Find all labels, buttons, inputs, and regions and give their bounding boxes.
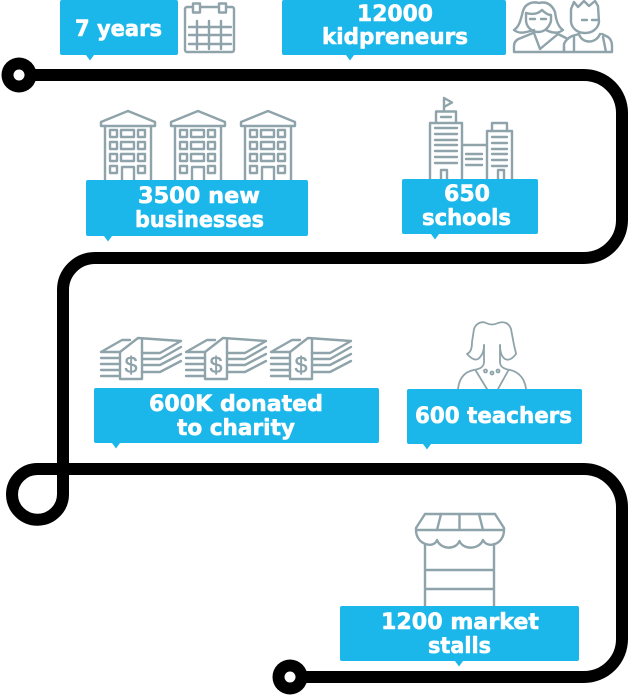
callout: 1200 market stalls <box>340 606 579 666</box>
icon: stacks of money: $ <box>125 352 138 378</box>
icon: market stall <box>416 514 504 607</box>
callout: 12000 kidpreneurs: kidpreneurs <box>322 24 468 50</box>
callout: 600 teachers <box>407 389 582 450</box>
callout: 650 schools: 650 <box>444 181 490 207</box>
icon: stacks of money <box>101 338 351 379</box>
callout: 600K donated to charity: 600K donated <box>149 391 323 417</box>
timeline end node <box>272 660 308 694</box>
icon: stacks of money: $ <box>210 352 223 378</box>
callout: 1200 market stalls: stalls <box>428 633 491 659</box>
icon: school <box>430 98 512 181</box>
icon: stacks of money: $ <box>295 352 308 378</box>
callout: 7 years <box>60 0 178 60</box>
callout: 650 schools: schools <box>422 205 511 231</box>
callout: 7 years: 7 years <box>75 16 162 42</box>
timeline start node <box>2 58 36 92</box>
callout: 1200 market stalls: 1200 market <box>381 609 539 635</box>
callout: 12000 kidpreneurs: 12000 <box>357 1 433 27</box>
callout: 3500 new businesses: 3500 new <box>138 183 260 209</box>
callout: 650 schools <box>402 179 538 240</box>
icon: calendar <box>185 4 234 52</box>
icon: two kids <box>514 1 612 52</box>
callout: 600K donated to charity: to charity <box>177 415 295 441</box>
callout: 600 teachers: 600 teachers <box>415 403 572 429</box>
callout: 3500 new businesses: businesses <box>135 207 264 233</box>
callout: 600K donated to charity <box>94 388 379 448</box>
icon: buildings <box>101 111 295 182</box>
icon: teacher <box>458 322 526 389</box>
callout: 3500 new businesses <box>86 180 308 242</box>
callout: 12000 kidpreneurs <box>282 0 506 60</box>
